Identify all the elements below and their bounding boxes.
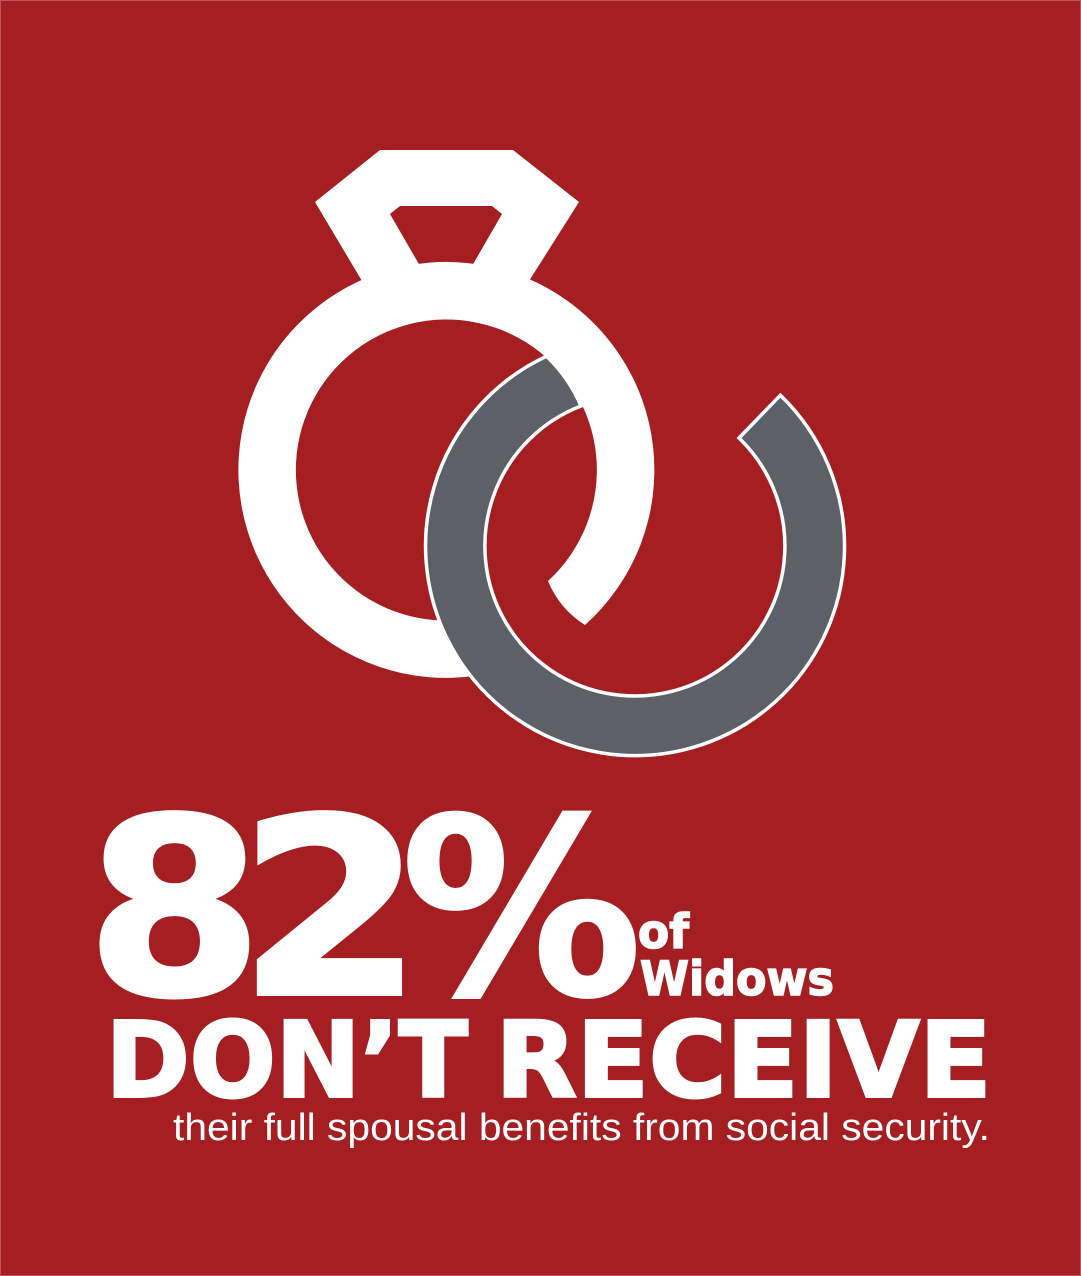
icon: interlocked wedding rings — [238, 150, 845, 756]
heading: DON'T RECEIVE: RECEIVE — [496, 1000, 992, 1122]
heading: DON'T RECEIVE: DON’T — [106, 1000, 468, 1122]
text: of Widows — [638, 905, 834, 1007]
statistic: 82%: % — [401, 767, 642, 1052]
heading: DON'T RECEIVE — [106, 1000, 992, 1122]
text: of Widows: of — [638, 905, 690, 960]
statistic: 82% — [86, 767, 642, 1052]
icon: white diamond ring — [238, 150, 654, 678]
statistic: 82%: 2 — [238, 767, 423, 1052]
text: of Widows: Widows — [640, 952, 834, 1007]
statistic: 82%: 8 — [86, 767, 263, 1052]
text: subtitle: their full spousal benefits from social security. — [173, 1107, 990, 1149]
icon: grey ring — [426, 356, 845, 756]
